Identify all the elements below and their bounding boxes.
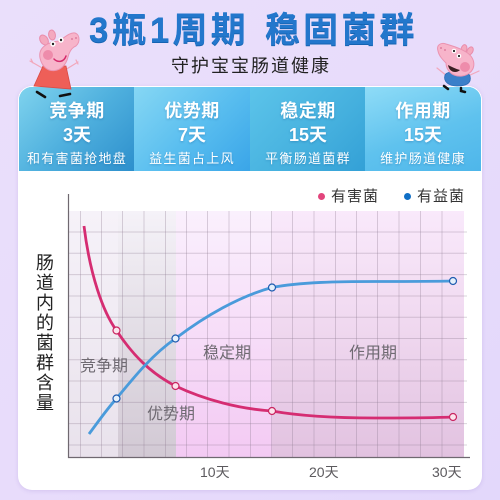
title: 3瓶1周期 稳固菌群	[89, 11, 418, 50]
harmful bacteria curve	[84, 226, 456, 420]
phase: competition: 3天	[63, 125, 91, 145]
subtitle: 守护宝宝肠道健康	[171, 56, 331, 76]
phase: competition: 和有害菌抢地盘	[27, 151, 127, 166]
phase: advantage	[134, 87, 250, 171]
y axis label: 道	[36, 273, 54, 293]
y axis label: 菌	[36, 333, 54, 353]
phase: stable	[250, 87, 366, 171]
phase labels: 竞争期	[80, 357, 128, 375]
phase: action: 15天	[404, 125, 442, 145]
y axis label: 的	[36, 313, 54, 333]
x axis labels: 10天	[200, 464, 230, 480]
x axis labels: 30天	[432, 464, 462, 480]
phase: advantage: 7天	[178, 125, 206, 145]
phase: advantage: 优势期	[164, 101, 220, 121]
y axis label: 群	[36, 353, 54, 373]
phase: stable: 15天	[289, 125, 327, 145]
icon: Peppa Pig	[30, 30, 80, 98]
axes	[68, 194, 470, 458]
y axis label: 内	[36, 293, 54, 313]
beneficial bacteria curve	[89, 278, 456, 434]
y axis label: 含	[36, 373, 54, 393]
phase: action: 作用期	[395, 101, 451, 121]
x axis labels	[200, 464, 462, 480]
phase labels: 作用期	[349, 344, 397, 362]
y axis label	[36, 253, 54, 413]
legend	[318, 188, 465, 205]
x axis labels: 20天	[309, 464, 339, 480]
phase: advantage: 益生菌占上风	[149, 151, 235, 166]
phase: stable: 平衡肠道菌群	[265, 151, 351, 166]
phase: stable: 稳定期	[280, 101, 336, 121]
phase: competition: 竞争期	[49, 101, 105, 121]
phase: action: 维护肠道健康	[380, 151, 466, 166]
phase bands	[69, 211, 464, 457]
phase labels: 稳定期	[203, 344, 251, 362]
phase: competition	[19, 87, 135, 171]
legend: beneficial: 有益菌	[417, 188, 465, 205]
legend: harmful: 有害菌	[331, 188, 379, 205]
phase labels: 优势期	[147, 405, 195, 423]
panel: phase header	[19, 87, 481, 171]
y axis label: 肠	[36, 253, 54, 273]
y axis label: 量	[36, 393, 54, 413]
panel: card	[18, 86, 482, 490]
icon: George Pig	[436, 42, 480, 94]
phase labels	[80, 344, 397, 423]
phase: action	[365, 87, 481, 171]
